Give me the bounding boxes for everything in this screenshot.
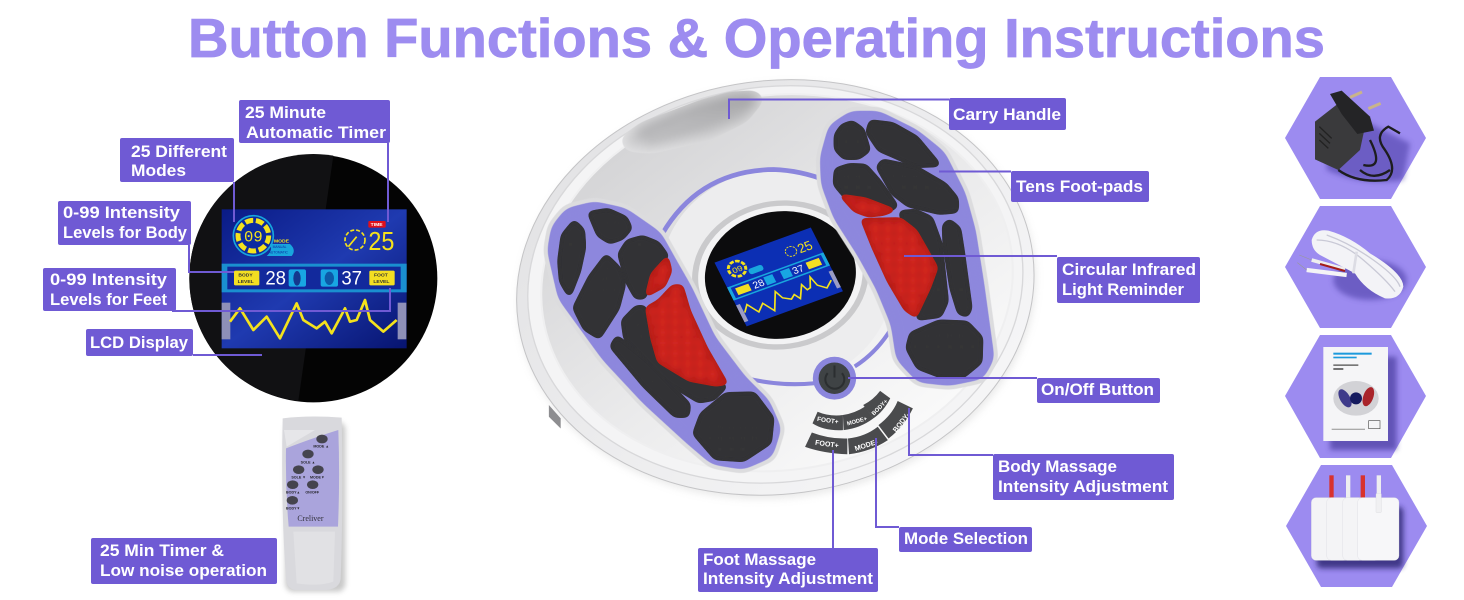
timer readout — [345, 221, 394, 256]
label: intensity for body — [58, 201, 191, 245]
leader line: on/off — [848, 377, 1037, 379]
mode tag: MODE — [274, 238, 290, 244]
label: carry handle — [949, 98, 1066, 130]
device: foot massager — [489, 47, 1063, 532]
keypad panel: SOLE ▲ — [301, 460, 315, 464]
accessory: electrode cables — [1285, 206, 1426, 328]
level band: 28 — [265, 269, 286, 290]
remote body — [282, 416, 345, 592]
leader line: 25 minute timer — [387, 143, 389, 222]
label: circular infrared light reminder — [1057, 257, 1200, 303]
title: Button Functions & Operating Instructions — [188, 7, 1325, 69]
mode tag: AUTOMATIC — [269, 250, 289, 254]
screen bezel — [682, 189, 879, 361]
mini LCD screen: 25 — [795, 237, 815, 256]
label: foot massage intensity adjustment: Foot Massage — [703, 551, 816, 569]
mode ring — [233, 216, 273, 256]
keypad panel: Creliver — [297, 514, 324, 523]
level band: LEVEL — [373, 279, 389, 285]
label: 25 min timer: 25 Min Timer & — [100, 542, 224, 560]
label: carry handle: Carry Handle — [953, 106, 1061, 124]
timer readout: TIME — [371, 222, 383, 228]
leader line: tens foot-pads — [939, 170, 1011, 172]
label: intensity for body: 0-99 Intensity — [63, 204, 181, 222]
label: LCD display — [86, 329, 193, 356]
accessory: electrode pads — [1286, 465, 1427, 587]
keypad panel: MODE▼ — [310, 475, 325, 479]
label: 25 different modes — [120, 138, 234, 182]
control buttons: BODY- — [892, 412, 912, 434]
remote control — [282, 416, 345, 592]
label: body massage intensity adjustment: Intensity Adjustment — [998, 478, 1169, 496]
leader line: body massage — [909, 408, 993, 455]
black glass circle — [189, 154, 437, 402]
label: circular infrared light reminder: Circular Infrared — [1062, 261, 1196, 279]
label: on/off button: On/Off Button — [1041, 381, 1154, 399]
label: 25 minute automatic timer — [239, 100, 390, 143]
label: 25 different modes: Modes — [131, 162, 186, 180]
label: circular infrared light reminder: Light Reminder — [1062, 281, 1185, 299]
label: 25 minute automatic timer: Automatic Timer — [246, 124, 387, 142]
control buttons: MODE+ — [846, 416, 869, 427]
label: foot massage intensity adjustment — [698, 548, 878, 592]
keypad panel — [286, 430, 339, 527]
label: foot massage intensity adjustment: Intensity Adjustment — [703, 570, 874, 588]
accessory: instruction manual — [1285, 335, 1426, 458]
label: 25 min timer — [91, 538, 277, 584]
leader line: feet intensity — [172, 288, 390, 311]
label: 25 minute automatic timer: 25 Minute — [245, 104, 326, 122]
keypad panel: BODY▼ — [286, 506, 300, 510]
keypad panel: SOLE ▼ — [291, 475, 306, 479]
label: mode selection — [899, 527, 1032, 552]
panel: LCD display close-up — [189, 154, 437, 402]
waveform — [222, 300, 406, 339]
mini LCD screen — [714, 227, 843, 326]
accessory: power adapter — [1285, 77, 1426, 199]
control buttons: MODE- — [854, 439, 879, 453]
LCD screen — [222, 209, 407, 348]
label: on/off button — [1037, 378, 1160, 403]
label: intensity for feet: Levels for Feet — [50, 291, 167, 309]
mode tag — [267, 238, 294, 256]
leader line: LCD display — [193, 354, 262, 356]
carry handle — [622, 92, 764, 152]
level band: LEVEL — [238, 279, 254, 285]
mini LCD screen: 37 — [791, 264, 807, 277]
leader line: circular infrared — [904, 255, 1057, 257]
label: body massage intensity adjustment: Body Massage — [998, 458, 1117, 476]
left foot pad — [550, 204, 779, 467]
timer readout: 25 — [368, 226, 394, 256]
mini LCD screen: 09 — [731, 264, 745, 275]
label: tens foot-pads — [1011, 171, 1149, 202]
leader line: body intensity — [189, 245, 234, 272]
leader line: foot massage — [832, 450, 834, 548]
label: intensity for feet — [43, 268, 176, 311]
level band: 37 — [341, 269, 362, 290]
label: intensity for body: Levels for Body — [63, 224, 188, 242]
leader line: mode selection — [876, 438, 899, 527]
level band — [222, 264, 407, 292]
control buttons: FOOT+ — [817, 416, 839, 426]
leader line: carry handle — [729, 100, 949, 119]
leader line: 25 modes — [233, 182, 235, 222]
label: 25 min timer: Low noise operation — [100, 562, 267, 580]
right foot pad — [823, 114, 992, 383]
label: LCD display: LCD Display — [90, 334, 189, 352]
label: mode selection: Mode Selection — [904, 530, 1028, 548]
label: tens foot-pads: Tens Foot-pads — [1016, 178, 1143, 196]
control buttons — [805, 391, 913, 454]
label: 25 different modes: 25 Different — [131, 143, 228, 161]
control buttons: BODY+ — [871, 398, 890, 417]
mode tag: MANUAL — [273, 245, 287, 249]
level band: BODY — [238, 273, 253, 279]
control buttons: FOOT+ — [815, 440, 839, 450]
centre ring — [660, 169, 894, 386]
power button — [813, 357, 856, 400]
keypad panel: MODE ▲ — [313, 444, 329, 448]
mini LCD screen: 28 — [751, 278, 767, 291]
label: body massage intensity adjustment — [993, 454, 1174, 500]
keypad panel: ON/OFF — [305, 491, 320, 495]
label: intensity for feet: 0-99 Intensity — [50, 271, 168, 289]
keypad panel: BODY▲ — [286, 491, 300, 495]
device shell — [489, 47, 1063, 532]
level band: FOOT — [374, 273, 388, 279]
mode ring: 09 — [244, 229, 263, 247]
